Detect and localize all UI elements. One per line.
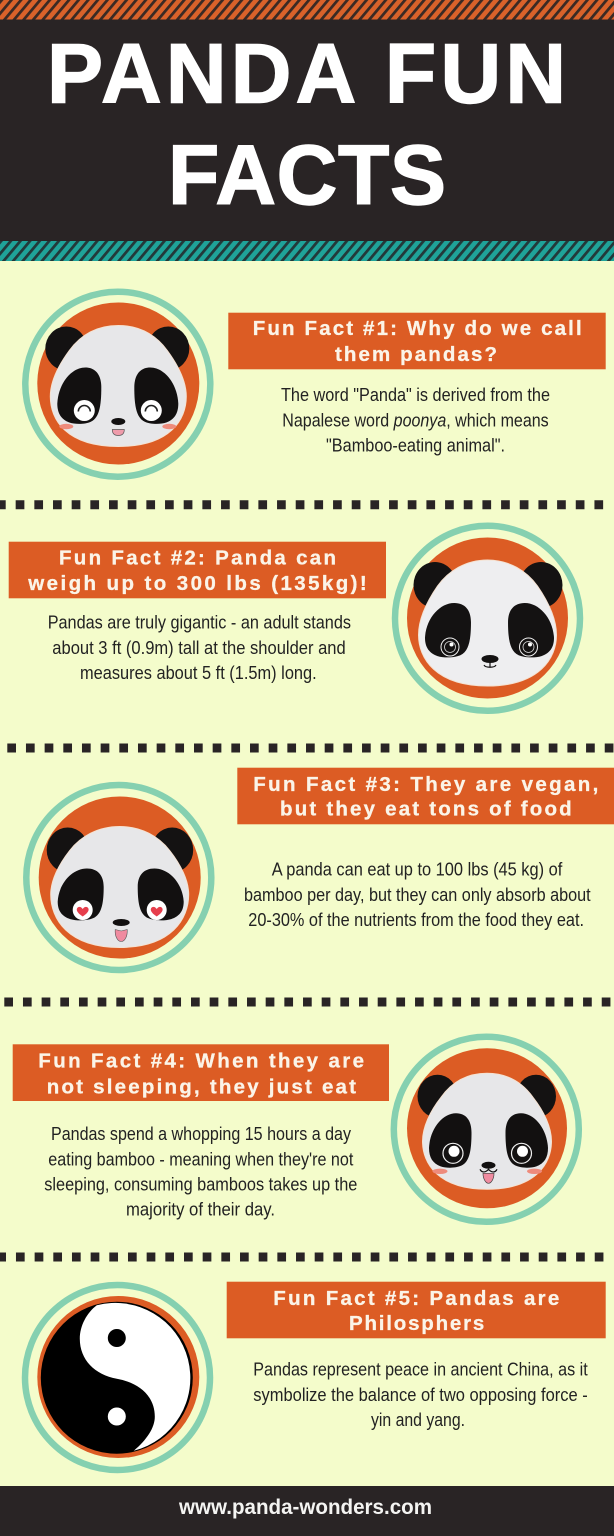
heading bar: Fun Fact #1: Why do we call <box>253 317 582 340</box>
heading bar: not sleeping, they just eat <box>47 1075 356 1098</box>
header banner <box>0 0 614 261</box>
body text <box>48 612 351 683</box>
icon: smiling panda medallion <box>394 1037 579 1222</box>
body text: A panda can eat up to 100 lbs (45 kg) of <box>272 860 563 880</box>
body text <box>44 1124 357 1220</box>
heading bar: Fun Fact #3: They are vegan, <box>253 773 598 796</box>
heading bar <box>9 542 386 598</box>
body text: about 3 ft (0.9m) tall at the shoulder and <box>52 638 346 658</box>
heading bar <box>13 1044 389 1101</box>
footer bar <box>0 1486 614 1536</box>
icon: yin-yang medallion <box>25 1285 210 1470</box>
panel: fact 3 <box>26 768 614 970</box>
body text: yin and yang. <box>371 1410 465 1430</box>
heading bar <box>227 1282 606 1338</box>
heading bar: Fun Fact #2: Panda can <box>59 546 336 569</box>
body text: Pandas spend a whopping 15 hours a day <box>51 1124 351 1144</box>
body text: Napalese word poonya, which means <box>282 411 549 431</box>
panel: fact 1 <box>25 292 606 477</box>
title: PANDA FUN <box>47 27 566 121</box>
panel: fact 4 <box>13 1037 579 1222</box>
heading bar: Philosphers <box>349 1312 484 1335</box>
panel: fact 2 <box>9 526 580 711</box>
icon: heart-eyed panda medallion <box>26 785 211 970</box>
panel: fact 5 <box>25 1282 606 1470</box>
heading bar: Fun Fact #5: Pandas are <box>273 1287 559 1310</box>
heading bar: but they eat tons of food <box>280 798 572 821</box>
body text: sleeping, consuming bamboos takes up the <box>44 1175 357 1195</box>
body text: The word "Panda" is derived from the <box>281 385 550 405</box>
heading bar: Fun Fact #4: When they are <box>38 1050 364 1073</box>
title <box>47 27 566 222</box>
heading bar: weigh up to 300 lbs (135kg)! <box>27 572 367 595</box>
body text: "Bamboo-eating animal". <box>326 436 505 456</box>
body text: 20-30% of the nutrients from the food they eat. <box>248 910 584 930</box>
title: FACTS <box>168 128 446 222</box>
heading bar: them pandas? <box>335 343 497 366</box>
body text <box>253 1360 588 1430</box>
footer bar: www.panda-wonders.com <box>178 1496 432 1519</box>
icon: happy panda medallion <box>25 292 210 477</box>
body text <box>244 860 591 930</box>
heading bar <box>228 313 606 369</box>
body text: measures about 5 ft (1.5m) long. <box>80 663 317 683</box>
body text <box>281 385 550 456</box>
body text: Pandas are truly gigantic - an adult stands <box>48 612 351 632</box>
icon: wide-eyed panda medallion <box>395 526 580 711</box>
body text: eating bamboo - meaning when they're not <box>48 1150 353 1170</box>
heading bar <box>237 768 614 824</box>
body text: symbolize the balance of two opposing force - <box>253 1385 588 1405</box>
body text: majority of their day. <box>126 1200 275 1220</box>
